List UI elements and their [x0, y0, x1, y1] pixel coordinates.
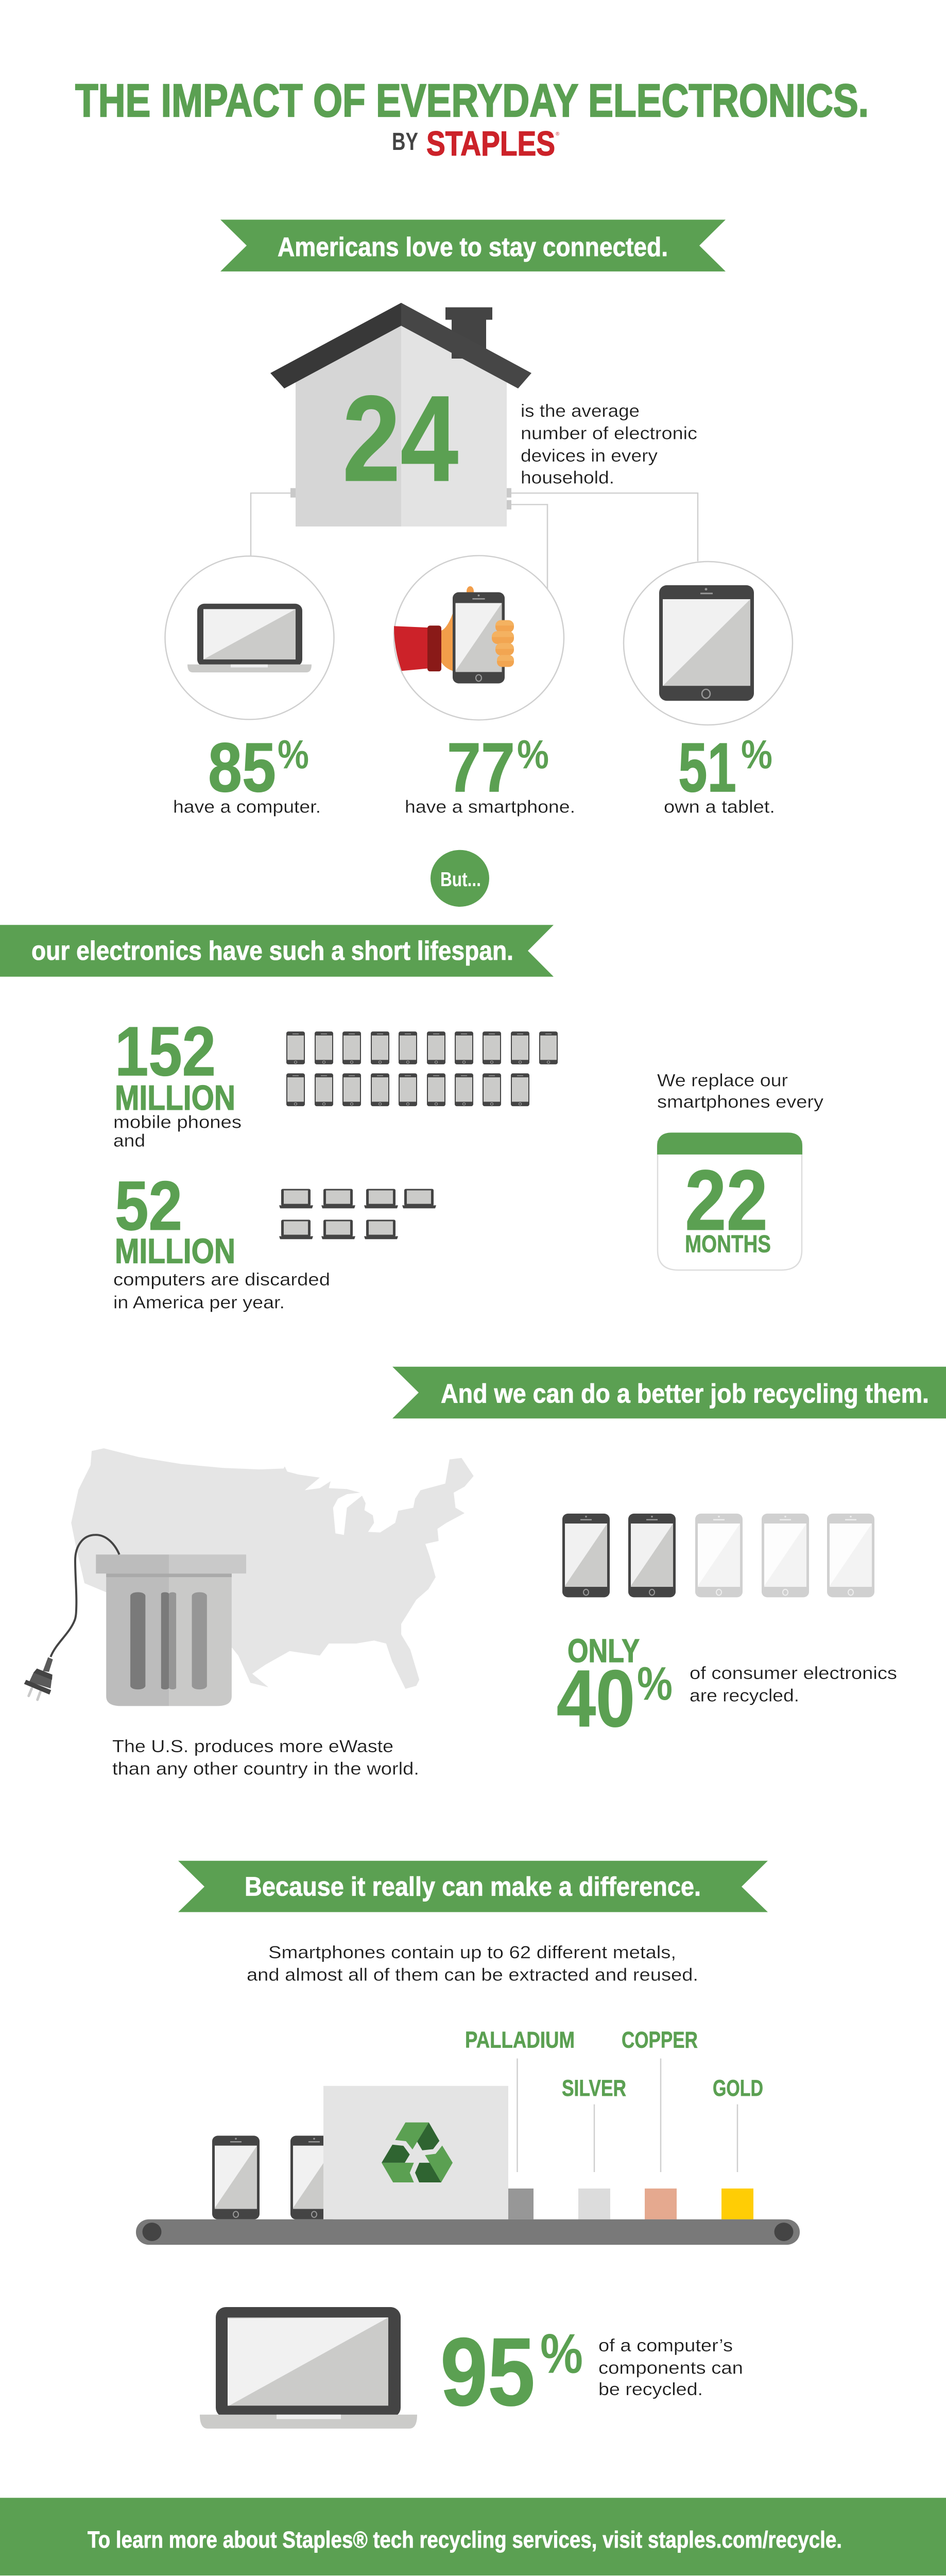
footer banner — [0, 2498, 946, 2575]
icon: calendar 22 months — [657, 1132, 802, 1270]
text: average devices: devices in every — [521, 447, 658, 466]
icon: large laptop — [200, 2307, 417, 2429]
stat: 51% own a tablet — [664, 728, 775, 817]
stat: 152 million mobile phones: mobile phones — [113, 1113, 242, 1132]
stat: 77% have a smartphone: 77 — [447, 728, 515, 807]
icon: calendar 22 months: MONTHS — [685, 1230, 771, 1258]
stat: only 40%: % — [637, 1657, 673, 1710]
stat: 52 million computers: computers are discarded — [113, 1270, 330, 1290]
stat: 95% of a computer's components: be recycled. — [598, 2380, 703, 2399]
byline: by Staples logo: BY — [392, 128, 418, 156]
icon: power cord and plug — [24, 1535, 119, 1700]
recycling machine box — [323, 2086, 508, 2219]
byline: by Staples logo: STAPLES — [426, 125, 555, 163]
icon: house with 24 — [270, 303, 531, 527]
metal blocks — [508, 2189, 753, 2219]
stat: 52 million computers: in America per year. — [113, 1293, 285, 1313]
stat: 51% own a tablet: % — [741, 732, 772, 777]
pictogram: 2 of 5 phones recycled — [562, 1514, 874, 1597]
stat: 77% have a smartphone — [405, 728, 575, 817]
metal leader lines — [517, 2059, 737, 2172]
text: U.S. produces more eWaste: than any other country in the world. — [112, 1759, 419, 1778]
text: we replace our smartphones — [657, 1071, 824, 1112]
banner: our electronics have such a short lifespan — [0, 925, 554, 977]
banner: because it really can make a difference: Because it really can make a difference. — [245, 1872, 701, 1902]
icon: calendar 22 months: 22 — [685, 1152, 768, 1248]
stat: 95% of a computer's components: 95 — [440, 2318, 535, 2426]
text: U.S. produces more eWaste — [112, 1737, 419, 1778]
text: smartphones contain 62 metals: and almost all of them can be extracted and reused. — [247, 1965, 698, 1985]
icon: trash can — [96, 1554, 246, 1706]
stat: only 40%: of consumer electronics — [690, 1664, 897, 1683]
text: U.S. produces more eWaste: The U.S. produces more eWaste — [112, 1737, 393, 1756]
icon: hand holding smartphone in circle — [394, 555, 564, 720]
stat: 51% own a tablet: own a tablet. — [664, 798, 775, 817]
stat: 52 million computers — [113, 1167, 330, 1313]
stat: 85% have a computer: % — [278, 732, 309, 777]
byline: by Staples logo — [392, 125, 560, 163]
banner: Americans love to stay connected: Americans love to stay connected. — [278, 232, 668, 262]
stat: 95% of a computer's components — [440, 2318, 743, 2426]
stat: 52 million computers: 52 — [115, 1167, 182, 1245]
conveyor belt — [136, 2219, 800, 2245]
stat: 77% have a smartphone: have a smartphone. — [405, 798, 575, 817]
icon: tablet in circle — [624, 562, 793, 725]
stat: 152 million mobile phones: 152 — [115, 1012, 216, 1091]
text: average devices: is the average — [521, 402, 640, 421]
stat: only 40%: ONLY — [567, 1632, 640, 1669]
text: average devices: household. — [521, 468, 614, 488]
stat: only 40%: are recycled. — [690, 1686, 799, 1705]
stat: 95% of a computer's components: components can — [598, 2359, 743, 2378]
text: smartphones contain 62 metals: Smartphones contain up to 62 different metals, — [268, 1943, 676, 1962]
stat: 85% have a computer — [173, 728, 321, 817]
stat: 52 million computers: MILLION — [115, 1232, 235, 1270]
badge: But... — [431, 850, 489, 907]
pictogram: computers — [279, 1189, 436, 1239]
metal labels: SILVER — [562, 2075, 626, 2101]
text: smartphones contain 62 metals — [247, 1943, 698, 1985]
metal labels — [465, 2027, 763, 2101]
stat: only 40% — [557, 1632, 897, 1743]
stat: 85% have a computer: 85 — [208, 728, 276, 807]
stat: 95% of a computer's components: of a computer’s — [598, 2336, 733, 2355]
stat: 152 million mobile phones: MILLION — [115, 1078, 235, 1117]
stat: only 40%: 40 — [557, 1653, 635, 1743]
text: we replace our smartphones: We replace our — [657, 1071, 788, 1090]
text: we replace our smartphones: smartphones every — [657, 1093, 824, 1112]
metal labels: COPPER — [622, 2027, 698, 2053]
stat: 152 million mobile phones — [113, 1012, 242, 1150]
metal labels: PALLADIUM — [465, 2027, 575, 2053]
byline: by Staples logo: ® — [556, 131, 560, 137]
metal labels: GOLD — [713, 2075, 763, 2101]
connector lines — [251, 493, 698, 590]
banner: Americans love to stay connected — [220, 219, 726, 272]
conveyor illustration: phones — [212, 2136, 338, 2219]
stat: 77% have a smartphone: % — [517, 732, 549, 777]
text: average devices — [521, 402, 697, 488]
icon: laptop in circle — [165, 556, 334, 719]
stat: 85% have a computer: have a computer. — [173, 798, 321, 817]
stat: 51% own a tablet: 51 — [678, 728, 736, 807]
stat: 95% of a computer's components: % — [540, 2323, 583, 2385]
map: United States — [71, 1448, 474, 1689]
icon: recycling symbol — [382, 2123, 453, 2182]
banner: and we can do a better job recycling them — [392, 1367, 946, 1418]
badge: But...: But... — [440, 868, 481, 891]
icon: house with 24: 24 — [342, 371, 458, 507]
stat: 152 million mobile phones: and — [113, 1131, 145, 1150]
banner: our electronics have such a short lifespan: our electronics have such a short lifespan. — [31, 936, 513, 966]
pictogram: mobile phones — [286, 1031, 558, 1106]
text: average devices: number of electronic — [521, 424, 697, 444]
banner: because it really can make a difference — [178, 1861, 768, 1912]
